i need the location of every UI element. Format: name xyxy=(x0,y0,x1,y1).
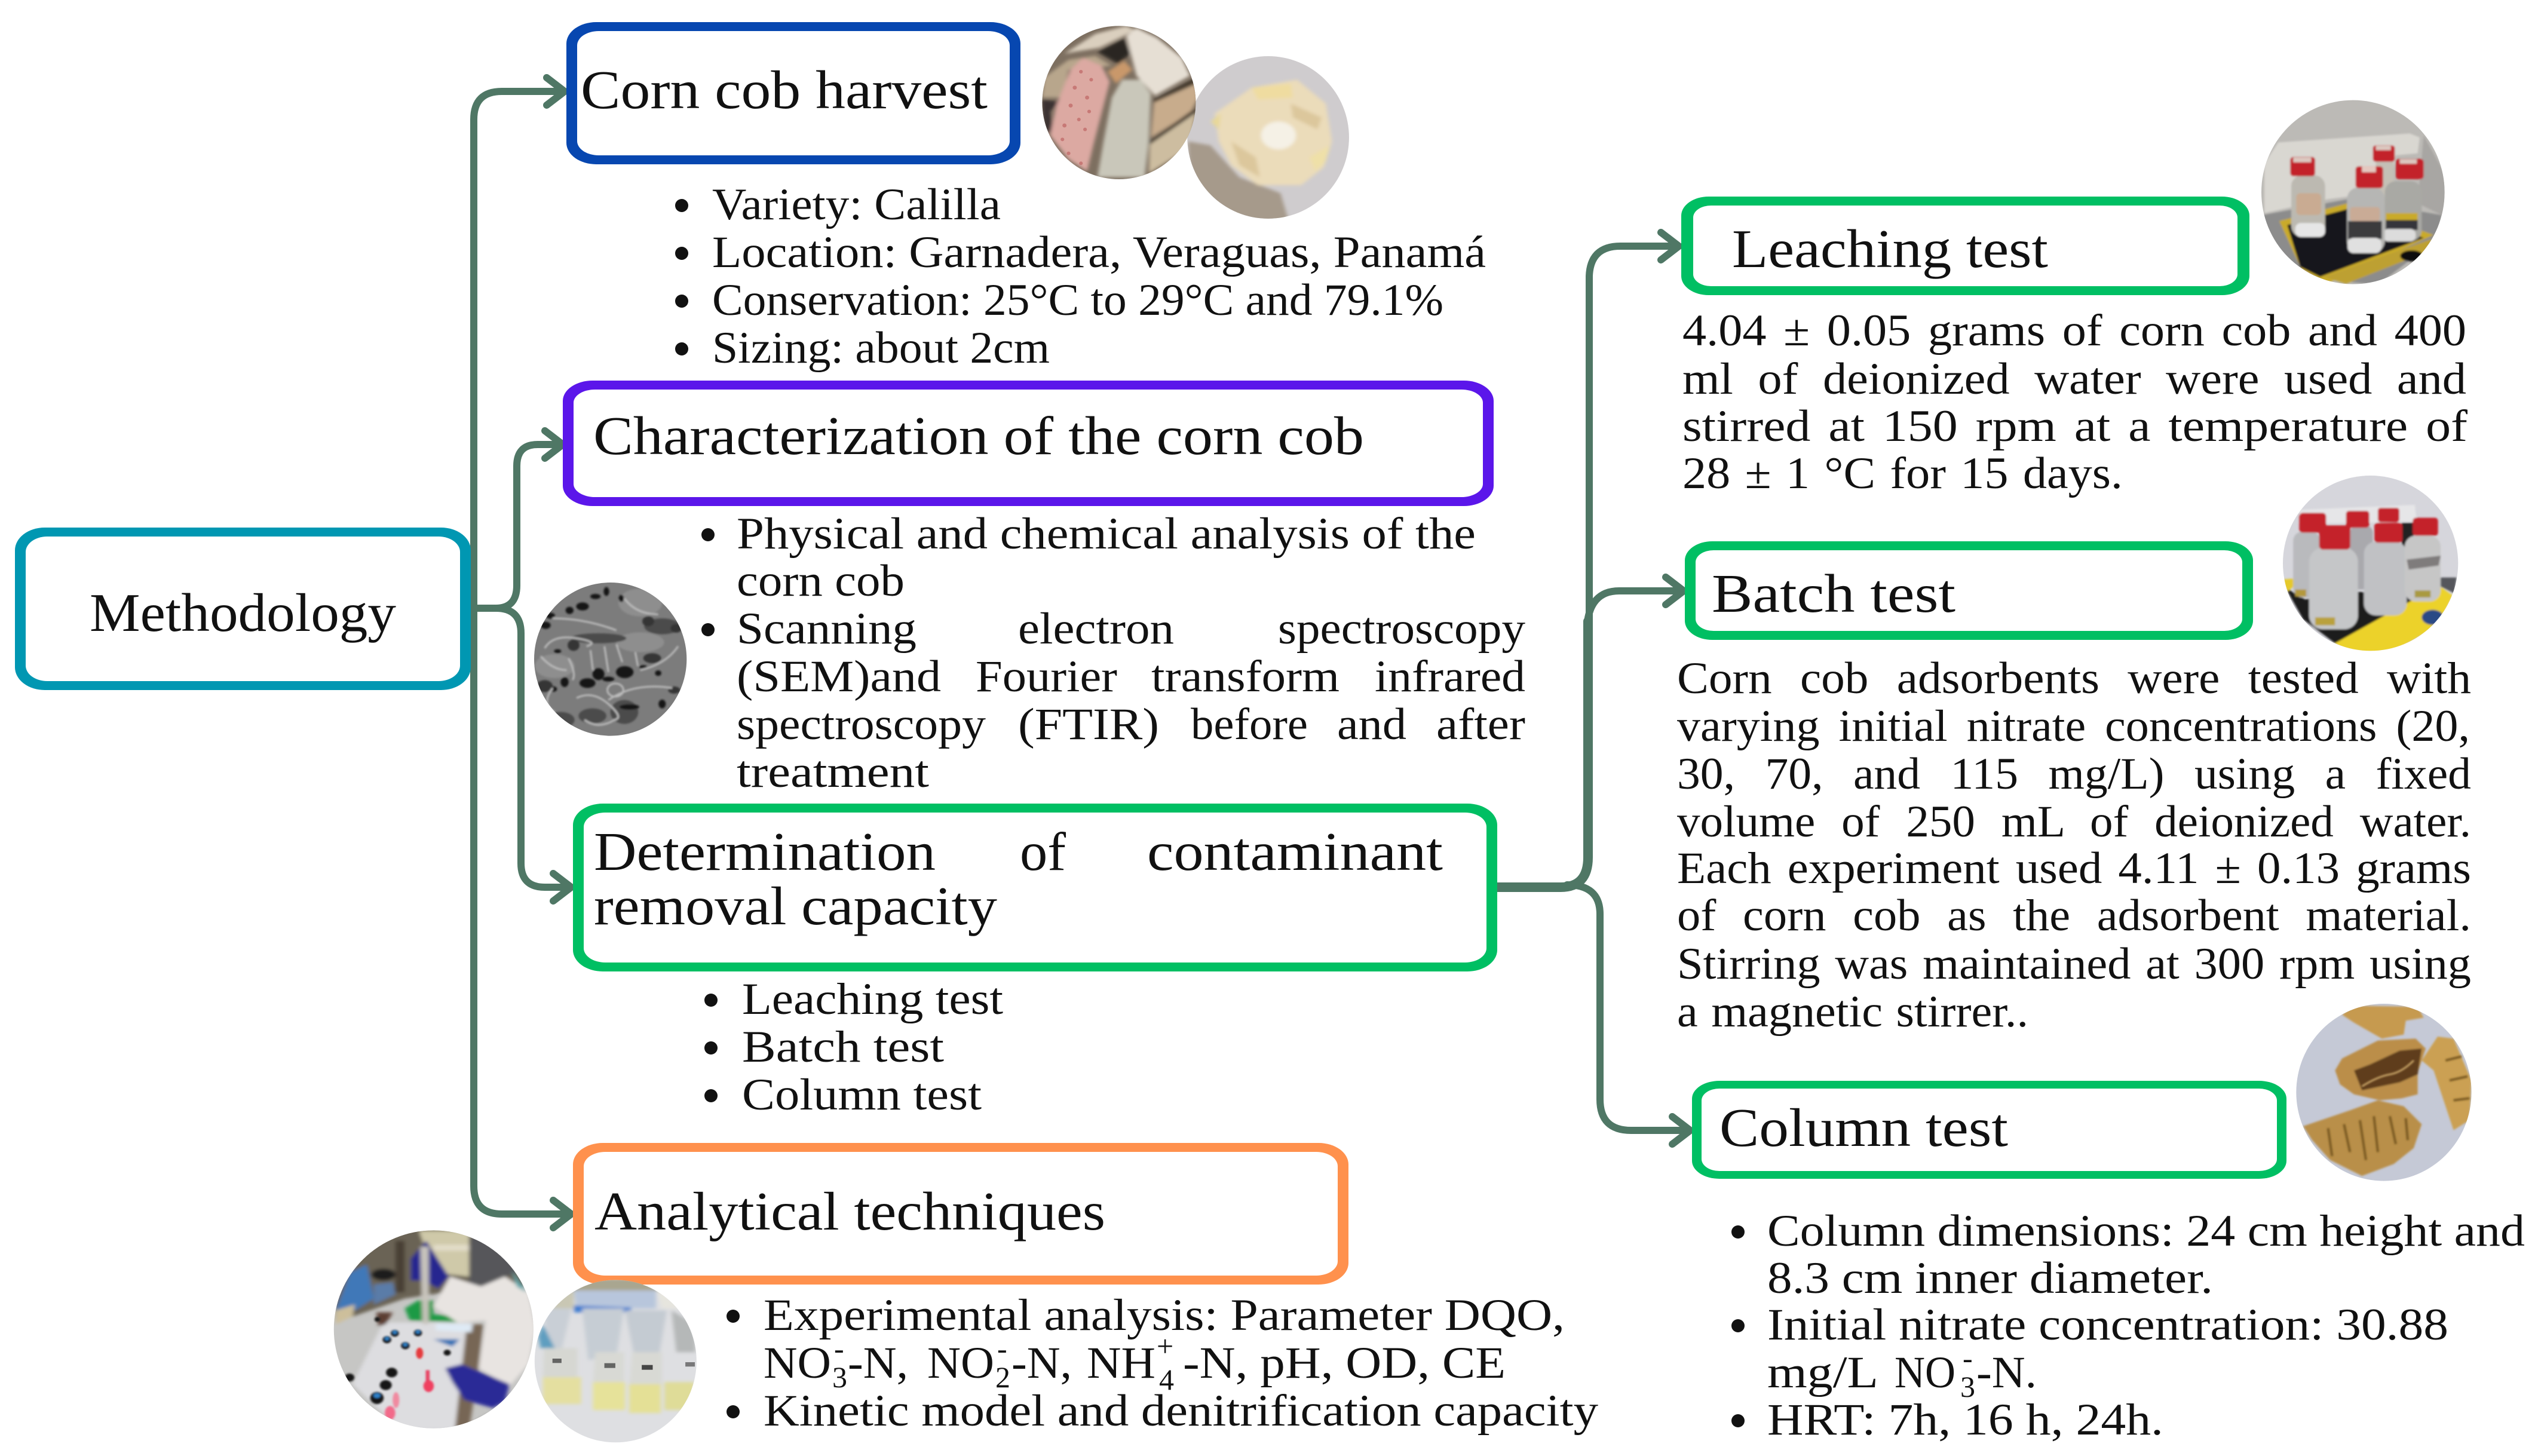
bullets: analytical techniques details: + xyxy=(1157,1329,1173,1363)
bullets: corn cob harvest details: Conservation: 25°C to 29°C and 79.1% xyxy=(712,275,1443,325)
paragraph: leaching test description: 28 ± 1 °C for 15 days. xyxy=(1682,449,2123,498)
bullets: characterization details: Fourier xyxy=(976,652,1117,701)
paragraph: batch test description: Each experiment used 4.11 ± 0.13 grams xyxy=(1677,844,2471,893)
box: Characterization of the corn cob: Characterization of the corn cob xyxy=(593,406,1364,466)
bullets: column test details: HRT: 7h, 16 h, 24h. xyxy=(1767,1395,2163,1445)
bullets: column test details xyxy=(1731,1206,2525,1445)
box: Leaching test xyxy=(1681,197,2249,295)
bullets: column test details: mg/L xyxy=(1767,1348,1878,1397)
box: Column test xyxy=(1692,1081,2286,1179)
bullets: corn cob harvest details: Variety: Calilla xyxy=(712,180,1001,229)
bullets: characterization details: after xyxy=(1436,700,1525,749)
box: Determination of contaminant removal capacity: contaminant xyxy=(1147,822,1443,882)
bullets: characterization details xyxy=(701,509,1526,797)
box: Analytical techniques: Analytical techniques xyxy=(594,1181,1105,1242)
photo: corn cob cross-section xyxy=(1186,56,1353,221)
bullets: corn cob harvest details xyxy=(675,180,1486,373)
box: Determination of contaminant removal capacity xyxy=(573,804,1497,971)
box: Batch test xyxy=(1685,541,2253,640)
bullets: analytical techniques details: Kinetic model and denitrification capacity xyxy=(764,1386,1599,1436)
bullets: corn cob harvest details: Sizing: about 2cm xyxy=(712,323,1050,373)
bullets: analytical techniques details: 4 xyxy=(1159,1363,1174,1396)
paragraph: leaching test description xyxy=(1682,306,2468,498)
photo: SEM micrograph xyxy=(533,581,688,737)
bullets: analytical techniques details: NO xyxy=(927,1338,994,1388)
bullets: characterization details: before xyxy=(1191,700,1308,749)
bullets: removal capacity tests: Column test xyxy=(742,1070,982,1120)
paragraph: leaching test description: 4.04 ± 0.05 grams of corn cob and 400 xyxy=(1682,306,2466,355)
box: Corn cob harvest xyxy=(566,22,1020,164)
connector: removal capacity to three tests xyxy=(1497,232,1690,1144)
box: Leaching test: Leaching test xyxy=(1732,219,2048,279)
paragraph: batch test description xyxy=(1677,654,2471,1037)
bullets: characterization details: Scanning xyxy=(737,604,916,654)
bullets: characterization details: corn cob xyxy=(737,556,905,606)
bullets: analytical techniques details: - xyxy=(997,1332,1007,1365)
box: Column test: Column test xyxy=(1719,1098,2008,1158)
bullets: analytical techniques details: NO xyxy=(764,1338,831,1388)
bullets: characterization details: spectroscopy xyxy=(1278,604,1526,654)
bullets: removal capacity tests xyxy=(704,974,1003,1120)
bullets: analytical techniques details: - xyxy=(834,1332,844,1365)
bullets: analytical techniques details: 2 xyxy=(995,1360,1010,1394)
paragraph: batch test description: a magnetic stirrer.. xyxy=(1677,987,2028,1037)
bullets: characterization details: electron xyxy=(1018,604,1174,654)
paragraph: leaching test description: stirred at 150 rpm at a temperature of xyxy=(1682,401,2468,451)
photo: leaching test bottles xyxy=(2260,100,2445,285)
bullets: characterization details: (FTIR) xyxy=(1018,700,1159,749)
bullets: characterization details: Physical and chemical analysis of the xyxy=(737,509,1476,559)
box: Determination of contaminant removal capacity: of xyxy=(1020,822,1066,882)
bullets: analytical techniques details xyxy=(727,1291,1599,1436)
bullets: analytical techniques details: 3 xyxy=(832,1360,847,1394)
photo: laboratory technician xyxy=(329,1225,543,1430)
bullets: removal capacity tests: Batch test xyxy=(742,1022,944,1072)
bullets: column test details: -N. xyxy=(1976,1348,2037,1397)
paragraph: batch test description: 30, 70, and 115 mg/L) using a fixed xyxy=(1677,749,2471,799)
paragraph: leaching test description: ml of deionized water were used and xyxy=(1682,354,2466,404)
box: Analytical techniques xyxy=(573,1143,1348,1285)
bullets: column test details: Column dimensions: 24 cm height and xyxy=(1767,1206,2525,1256)
paragraph: batch test description: Corn cob adsorbents were tested with xyxy=(1677,654,2471,703)
photo: corn cob pieces xyxy=(2295,1003,2473,1182)
photo: batch test bottles xyxy=(2281,474,2460,653)
bullets: column test details: - xyxy=(1963,1341,1973,1375)
bullets: removal capacity tests: Leaching test xyxy=(742,974,1003,1024)
box: Determination of contaminant removal capacity: removal capacity xyxy=(594,876,998,936)
box: Methodology: Methodology xyxy=(90,583,397,643)
bullets: analytical techniques details: -N, pH, OD, CE xyxy=(1183,1338,1506,1388)
bullets: column test details: NO xyxy=(1895,1348,1955,1397)
bullets: analytical techniques details: NH xyxy=(1087,1338,1155,1388)
connector: methodology to four stages xyxy=(471,78,571,1228)
paragraph: batch test description: volume of 250 mL of deionized water. xyxy=(1677,797,2471,847)
bullets: characterization details: (SEM)and xyxy=(737,652,941,701)
bullets: characterization details: transform xyxy=(1151,652,1340,701)
bullets: column test details: 3 xyxy=(1960,1370,1975,1403)
photo: sample vials xyxy=(534,1279,698,1444)
bullets: characterization details: infrared xyxy=(1375,652,1525,701)
bullets: characterization details: treatment xyxy=(737,747,929,797)
box: Characterization of the corn cob xyxy=(563,381,1494,506)
bullets: characterization details: and xyxy=(1337,700,1406,749)
paragraph: batch test description: of corn cob as the adsorbent material. xyxy=(1677,891,2471,940)
box: Determination of contaminant removal capacity: Determination xyxy=(594,822,936,882)
bullets: corn cob harvest details: Location: Garnadera, Veraguas, Panamá xyxy=(712,228,1486,277)
photo: corn cobs xyxy=(1040,24,1200,181)
bullets: column test details: Initial nitrate concentration: 30.88 xyxy=(1767,1300,2448,1350)
box: Batch test: Batch test xyxy=(1712,563,1955,624)
paragraph: batch test description: varying initial nitrate concentrations (20, xyxy=(1677,701,2470,751)
bullets: analytical techniques details: -N, xyxy=(848,1338,908,1388)
bullets: analytical techniques details: -N, xyxy=(1011,1338,1072,1388)
bullets: column test details: 8.3 cm inner diameter. xyxy=(1767,1253,2213,1303)
box: Corn cob harvest: Corn cob harvest xyxy=(581,60,988,120)
bullets: characterization details: spectroscopy xyxy=(737,700,986,749)
box: Methodology xyxy=(15,528,471,690)
bullets: analytical techniques details: Experimental analysis: Parameter DQO, xyxy=(764,1291,1565,1340)
paragraph: batch test description: Stirring was maintained at 300 rpm using xyxy=(1677,939,2471,989)
